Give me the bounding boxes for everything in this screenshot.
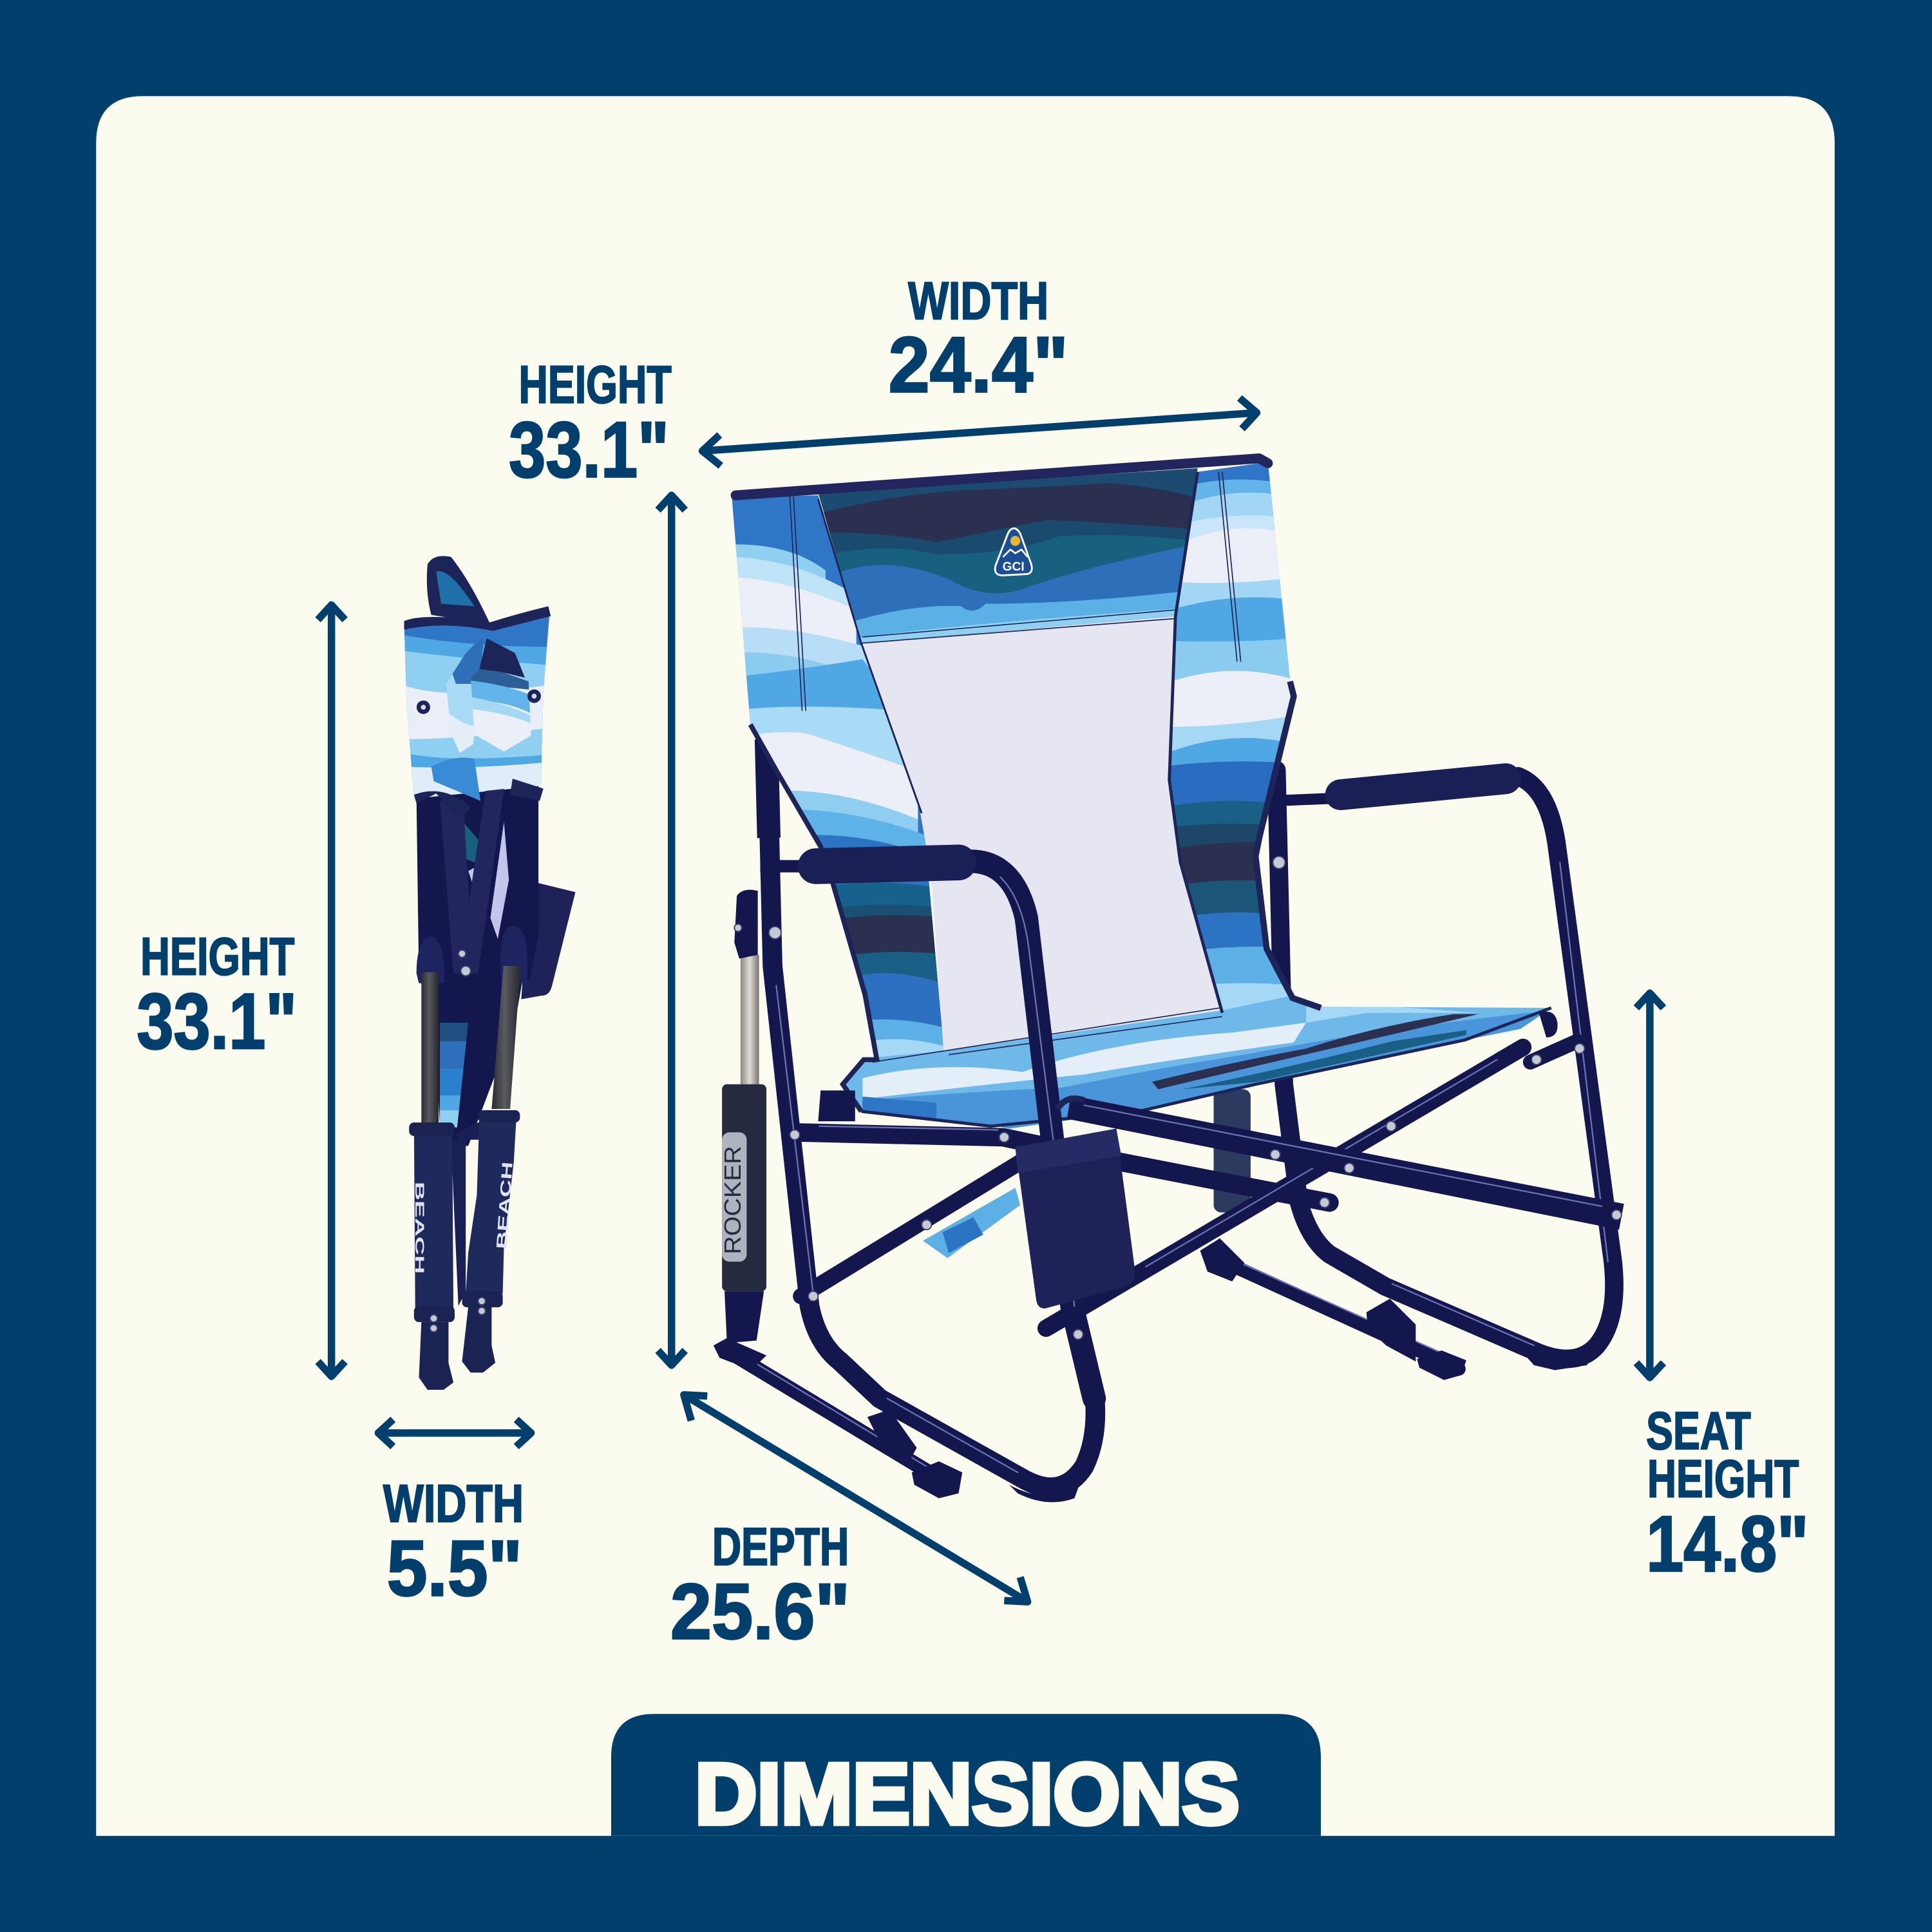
label: height 33.1 main: HEIGHT [518, 356, 672, 415]
folded trim strap [414, 779, 544, 819]
label: width 24.4: WIDTH [908, 272, 1048, 331]
fabric backrest right strip [1171, 464, 1291, 1010]
fabric backrest left strip [732, 495, 944, 1057]
arrow: folded height [318, 605, 345, 1376]
label: width 5.5 folded: WIDTH [383, 1475, 524, 1533]
photo: open rocker chair [714, 456, 1624, 1502]
heading tab: dimensions [611, 1714, 1321, 1842]
fabric trim and stitching [735, 459, 1551, 1126]
label: height 33.1 folded [137, 927, 297, 1065]
folded left sleeve: BEACH [412, 1182, 426, 1274]
label: width 5.5 folded [383, 1475, 524, 1613]
cup holder [1016, 1099, 1135, 1309]
folded eyelets [417, 689, 541, 714]
label: seat height 14.8: SEAT [1646, 1402, 1751, 1461]
arrow: seat height [1636, 993, 1663, 1378]
label: height 33.1 folded: HEIGHT [140, 927, 294, 986]
label: seat height 14.8: HEIGHT [1647, 1450, 1799, 1509]
label: depth 25.6: 25.6" [670, 1567, 850, 1656]
folded fabric centre flap [470, 668, 531, 752]
folded tubes [421, 966, 520, 1126]
fabric top panel [819, 468, 1198, 643]
folded bolts [430, 950, 486, 1332]
fabric seat [846, 996, 1547, 1128]
shock absorber with ROCKER label [714, 890, 962, 1499]
label: height 33.1 main [509, 356, 672, 493]
icon: GCI logo [995, 528, 1032, 575]
arrow: folded width [378, 1419, 531, 1446]
folded fabric lower centre [431, 757, 480, 801]
arrow: chair height [658, 495, 685, 1365]
label: depth 25.6: DEPTH [712, 1518, 849, 1577]
folded centre hinge [451, 1121, 484, 1306]
label: width 24.4: 24.4" [888, 320, 1068, 408]
label: height 33.1 folded: 33.1" [137, 977, 297, 1065]
label: seat height 14.8: 14.8" [1646, 1499, 1809, 1587]
arrow: chair width [703, 398, 1257, 466]
label: height 33.1 main: 33.1" [509, 405, 669, 493]
far rail feet [1200, 1238, 1595, 1380]
label: width 24.4 [888, 272, 1068, 408]
near back pole top [766, 739, 769, 838]
folded fabric left flap [446, 635, 484, 753]
seat corner cap [1539, 1012, 1558, 1037]
folded cup holder [521, 881, 575, 999]
photo: folded chair [401, 556, 575, 1390]
folded left sleeve [409, 1122, 455, 1390]
label: depth 25.6 [670, 1518, 850, 1656]
folded blue strip [440, 1023, 468, 1128]
far side tube and post [1214, 770, 1615, 1369]
mesh panel [861, 616, 1222, 1055]
folded frame [417, 758, 538, 1146]
label: width 5.5 folded: 5.5" [387, 1524, 522, 1613]
folded right sleeve [462, 1110, 520, 1372]
arrow: depth [684, 1395, 1028, 1602]
folded right sleeve: BEACH [493, 1161, 516, 1249]
icon: GCI logo: GCI [1003, 560, 1025, 574]
near frame bars [792, 1041, 1624, 1328]
near rocker tube and arm [760, 813, 1095, 1502]
frame bolts [734, 857, 1622, 1340]
far arm pad [1271, 779, 1506, 801]
shock absorber with ROCKER label: ROCKER [719, 1146, 746, 1255]
heading tab: dimensions: DIMENSIONS [695, 1747, 1240, 1842]
folded fabric outer [404, 616, 549, 799]
folded top bow [404, 556, 551, 677]
label: seat height 14.8 [1646, 1402, 1809, 1587]
